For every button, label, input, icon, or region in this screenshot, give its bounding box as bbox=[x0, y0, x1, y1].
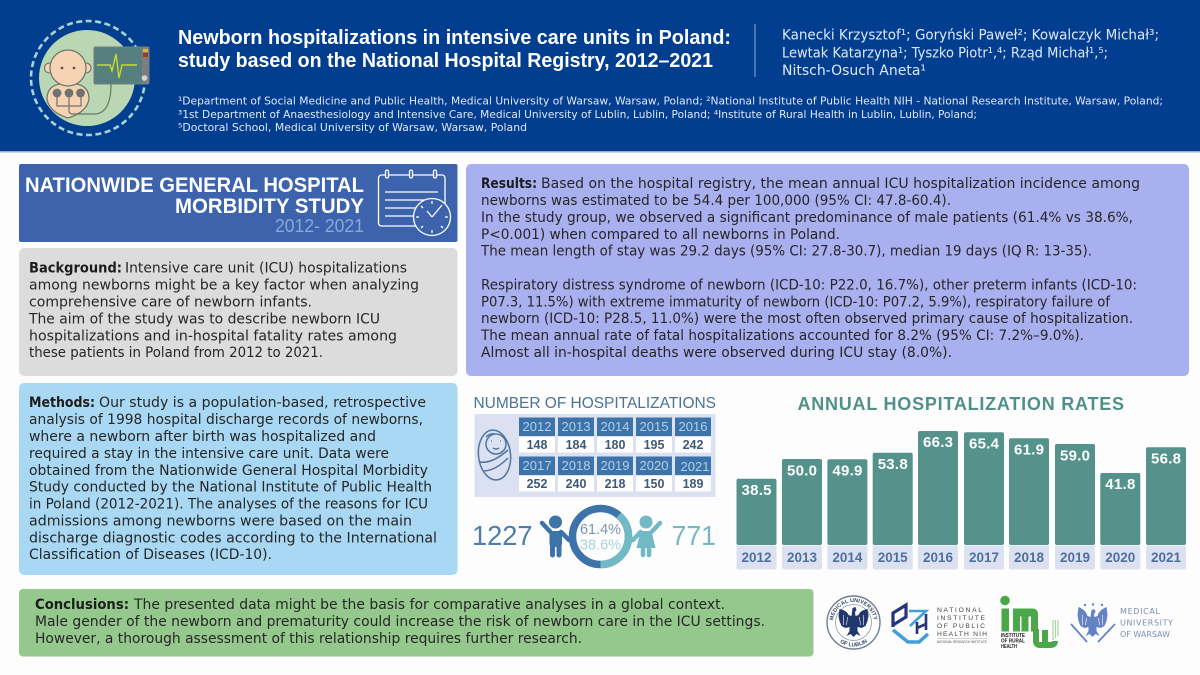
heading: study name: MORBIDITY STUDY bbox=[175, 195, 364, 218]
panel: methods: where a newborn after birth was hospitalized and bbox=[29, 429, 376, 445]
logo: Medical University of Warsaw: OF WARSAW bbox=[1120, 630, 1170, 639]
bar chart: annual rates bbox=[736, 431, 1186, 570]
panel: results: newborn (ICD-10: P28.5, 11.0%) were the most often observed primary cause of hospitalization. bbox=[481, 311, 1133, 327]
panel: background: Intensive care unit (ICU) hospitalizations bbox=[125, 260, 407, 276]
table row 2017-2021: 2020 bbox=[640, 458, 668, 473]
panel: conclusions: Conclusions: bbox=[35, 597, 129, 613]
logo: National Institute of Public Health NIH: NATIONAL bbox=[937, 607, 982, 614]
panel: conclusions: Male gender of the newborn and prematurity could increase the risk of newborn care in the ICU settings. bbox=[35, 614, 765, 630]
logo: Medical University of Lublin bbox=[826, 595, 881, 650]
panel: background bbox=[19, 248, 458, 376]
table row 2017-2021: 189 bbox=[683, 477, 703, 491]
bar values bbox=[742, 434, 1181, 499]
table row 2017-2021: 2021 bbox=[681, 459, 709, 474]
panel: conclusions: However, a thorough assessment of this relationship requires further research. bbox=[35, 631, 582, 647]
table row 2012-2016: 195 bbox=[644, 438, 664, 452]
panel: methods: Classification of Diseases (ICD-10). bbox=[29, 547, 272, 563]
bar values: 38.5 bbox=[742, 482, 772, 499]
female count: 771 bbox=[672, 520, 716, 551]
affiliations: ⁵Doctoral School, Medical University of Warsaw, Warsaw, Poland bbox=[178, 122, 527, 134]
authors bbox=[782, 28, 1159, 79]
title: study based on the National Hospital Registry, 2012–2021 bbox=[178, 50, 713, 72]
table row 2012-2016 bbox=[519, 418, 711, 452]
logo: Medical University of Warsaw: UNIVERSITY bbox=[1120, 618, 1173, 628]
year labels: 2019 bbox=[1060, 550, 1090, 565]
year labels: 2017 bbox=[969, 550, 999, 565]
panel: methods: Methods: bbox=[29, 395, 95, 411]
panel: results: Almost all in-hospital deaths were observed during ICU stay (8.0%). bbox=[481, 345, 952, 361]
table row 2012-2016: 184 bbox=[566, 438, 586, 452]
table row 2012-2016: 242 bbox=[683, 438, 703, 452]
icon: newborn on heart monitor bbox=[31, 21, 149, 135]
title: Newborn hospitalizations in intensive care units in Poland: bbox=[178, 27, 731, 49]
panel: results: P<0.001) when compared to all newborns in Poland. bbox=[481, 227, 840, 243]
panel: methods: required a stay in the intensive care unit. Data were bbox=[29, 446, 389, 462]
icon: calendar with clock bbox=[378, 170, 450, 236]
bars bbox=[736, 431, 1186, 545]
bar values: 61.9 bbox=[1014, 442, 1044, 458]
panel: conclusions: The presented data might be the basis for comparative analyses in a global context. bbox=[133, 597, 725, 613]
authors: Nitsch-Osuch Aneta¹ bbox=[782, 63, 926, 79]
donut chart: 38.6% bbox=[580, 538, 621, 554]
authors: Lewtak Katarzyna¹; Tyszko Piotr¹,⁴; Rząd Michał¹,⁵; bbox=[782, 46, 1108, 62]
table row 2012-2016: 2013 bbox=[562, 419, 590, 434]
heading: annual hospitalization rates: ANNUAL HOSPITALIZATION RATES bbox=[798, 394, 1124, 414]
icon: boy bbox=[542, 516, 569, 555]
logo: Institute of Rural Health: HEALTH bbox=[1001, 644, 1017, 650]
affiliations: ¹Department of Social Medicine and Public Health, Medical University of Warsaw, Warsaw, Poland; ²National Institute of Public Health NIH - National Research Institute, Warsaw, Poland; bbox=[178, 96, 1163, 108]
heading: number of hospitalizations: NUMBER OF HOSPITALIZATIONS bbox=[474, 395, 716, 412]
bar values: 56.8 bbox=[1151, 450, 1181, 468]
panel: background: these patients in Poland from 2012 to 2021. bbox=[29, 345, 323, 361]
logo: Medical University of Warsaw bbox=[1071, 603, 1173, 642]
panel: conclusions bbox=[19, 589, 814, 656]
logo: Medical University of Lublin: OF LUBLIN bbox=[840, 639, 868, 646]
panel: methods: in Poland (2012-2021). The analyses of the reasons for ICU bbox=[29, 496, 428, 512]
year labels: 2012 bbox=[742, 550, 772, 565]
panel: results: Results: bbox=[481, 176, 537, 192]
year labels: 2020 bbox=[1105, 550, 1135, 565]
affiliations bbox=[178, 96, 1163, 134]
panel: methods: discharge diagnostic codes according to the International bbox=[29, 530, 437, 546]
table row 2012-2016: 2012 bbox=[523, 419, 551, 434]
table row 2012-2016: 2015 bbox=[640, 419, 668, 434]
bar values: 59.0 bbox=[1060, 448, 1090, 464]
bar values: 49.9 bbox=[832, 462, 862, 480]
year chips bbox=[736, 546, 1186, 570]
title bbox=[178, 27, 731, 72]
year labels: 2021 bbox=[1151, 550, 1181, 565]
bar values: 66.3 bbox=[923, 434, 953, 451]
table row 2017-2021: 2017 bbox=[523, 458, 551, 473]
panel: background: The aim of the study was to describe newborn ICU bbox=[28, 312, 380, 328]
logo: Institute of Rural Health: OF RURAL bbox=[1001, 638, 1026, 644]
panel: results: Based on the hospital registry, the mean annual ICU hospitalization incidence among bbox=[541, 176, 1140, 192]
panel: results: P07.3, 11.5%) with extreme immaturity of newborn (ICD-10: P07.2, 5.9%), respiratory failure of bbox=[481, 294, 1111, 310]
logo: National Institute of Public Health NIH: OF PUBLIC bbox=[937, 623, 985, 630]
icon: swaddled baby bbox=[476, 428, 513, 482]
panel: methods: admissions among newborns were based on the main bbox=[29, 514, 412, 530]
donut chart bbox=[572, 508, 629, 564]
logo: National Institute of Public Health NIH: HEALTH NIH bbox=[937, 631, 987, 638]
table row 2017-2021: 2019 bbox=[601, 458, 629, 473]
panel: methods bbox=[19, 383, 458, 575]
logo: Institute of Rural Health: INSTITUTE bbox=[1001, 633, 1025, 639]
heading: study name: NATIONWIDE GENERAL HOSPITAL bbox=[25, 174, 364, 197]
table row 2017-2021: 150 bbox=[644, 477, 664, 491]
logo: National Institute of Public Health NIH: NATIONAL RESEARCH INSTITUTE bbox=[937, 640, 988, 644]
year labels: 2015 bbox=[878, 550, 908, 565]
heading: study name bbox=[25, 174, 364, 236]
panel: study banner bbox=[19, 164, 458, 242]
table row 2012-2016: 180 bbox=[605, 438, 625, 452]
table row 2012-2016: 2014 bbox=[601, 419, 629, 434]
logo: National Institute of Public Health NIH bbox=[893, 605, 988, 644]
panel: methods: analysis of 1998 hospital discharge records of newborns, bbox=[29, 412, 423, 428]
panel: background: Background: bbox=[29, 260, 122, 276]
male count: 1227 bbox=[472, 520, 532, 551]
bar values: 50.0 bbox=[787, 462, 817, 480]
panel: methods: Our study is a population-based, retrospective bbox=[99, 395, 426, 411]
heading: study name: 2012- 2021 bbox=[275, 216, 364, 236]
panel: background: comprehensive care of newborn infants. bbox=[29, 294, 312, 310]
affiliations: ³1st Department of Anaesthesiology and Intensive Care, Medical University of Lublin, Lublin, Poland; ⁴Institute of Rural Health in Lublin, Lublin, Poland; bbox=[178, 109, 977, 121]
panel: background: hospitalizations and in-hospital fatality rates among bbox=[29, 328, 397, 344]
logo: Medical University of Lublin: MEDICAL UNIVERSITY bbox=[829, 598, 878, 620]
bar values: 53.8 bbox=[878, 456, 908, 473]
donut chart: 61.4% bbox=[580, 522, 621, 538]
table row 2017-2021: 252 bbox=[527, 477, 547, 491]
panel: methods: obtained from the Nationwide General Hospital Morbidity bbox=[29, 463, 428, 479]
panel: background: among newborns might be a key factor when analyzing bbox=[29, 278, 419, 294]
table row 2017-2021: 240 bbox=[566, 477, 586, 491]
table row 2017-2021: 218 bbox=[605, 477, 625, 491]
icon: girl bbox=[633, 516, 660, 555]
authors: Kanecki Krzysztof¹; Goryński Paweł²; Kowalczyk Michał³; bbox=[782, 28, 1159, 44]
table row 2012-2016: 148 bbox=[527, 438, 547, 452]
sex split graphic bbox=[472, 508, 716, 564]
panel: results bbox=[466, 164, 1189, 376]
panel: methods: Study conducted by the National Institute of Public Health bbox=[29, 480, 432, 496]
year labels: 2013 bbox=[787, 550, 817, 565]
year labels: 2018 bbox=[1014, 550, 1044, 565]
table row 2012-2016: 2016 bbox=[679, 419, 707, 434]
bar values: 41.8 bbox=[1105, 476, 1135, 493]
table row 2017-2021 bbox=[519, 456, 711, 492]
logo: Medical University of Warsaw: MEDICAL bbox=[1120, 607, 1161, 616]
panel: results: In the study group, we observed a significant predominance of male patients (61.4% vs 38.6%, bbox=[481, 210, 1133, 226]
panel: results: Respiratory distress syndrome of newborn (ICD-10: P22.0, 16.7%), other preterm infants (ICD-10: bbox=[481, 278, 1137, 294]
bar values: 65.4 bbox=[969, 436, 1000, 452]
year labels bbox=[742, 550, 1181, 565]
logo: Institute of Rural Health bbox=[1000, 596, 1058, 650]
year labels: 2016 bbox=[923, 550, 953, 565]
panel: results: The mean annual rate of fatal hospitalizations accounted for 8.2% (95% CI: 7.2%–9.0%). bbox=[480, 328, 1084, 344]
table row 2017-2021: 2018 bbox=[562, 458, 590, 473]
year labels: 2014 bbox=[832, 550, 863, 565]
panel: hospitalizations per year table bbox=[474, 414, 716, 497]
panel: results: The mean length of stay was 29.2 days (95% CI: 27.8-30.7), median 19 days (IQ R: 13-35). bbox=[480, 244, 1092, 260]
panel: results: newborns was estimated to be 54.4 per 100,000 (95% CI: 47.8-60.4). bbox=[481, 193, 951, 209]
logo: National Institute of Public Health NIH: INSTITUTE bbox=[937, 615, 986, 622]
header band bbox=[0, 0, 1200, 152]
